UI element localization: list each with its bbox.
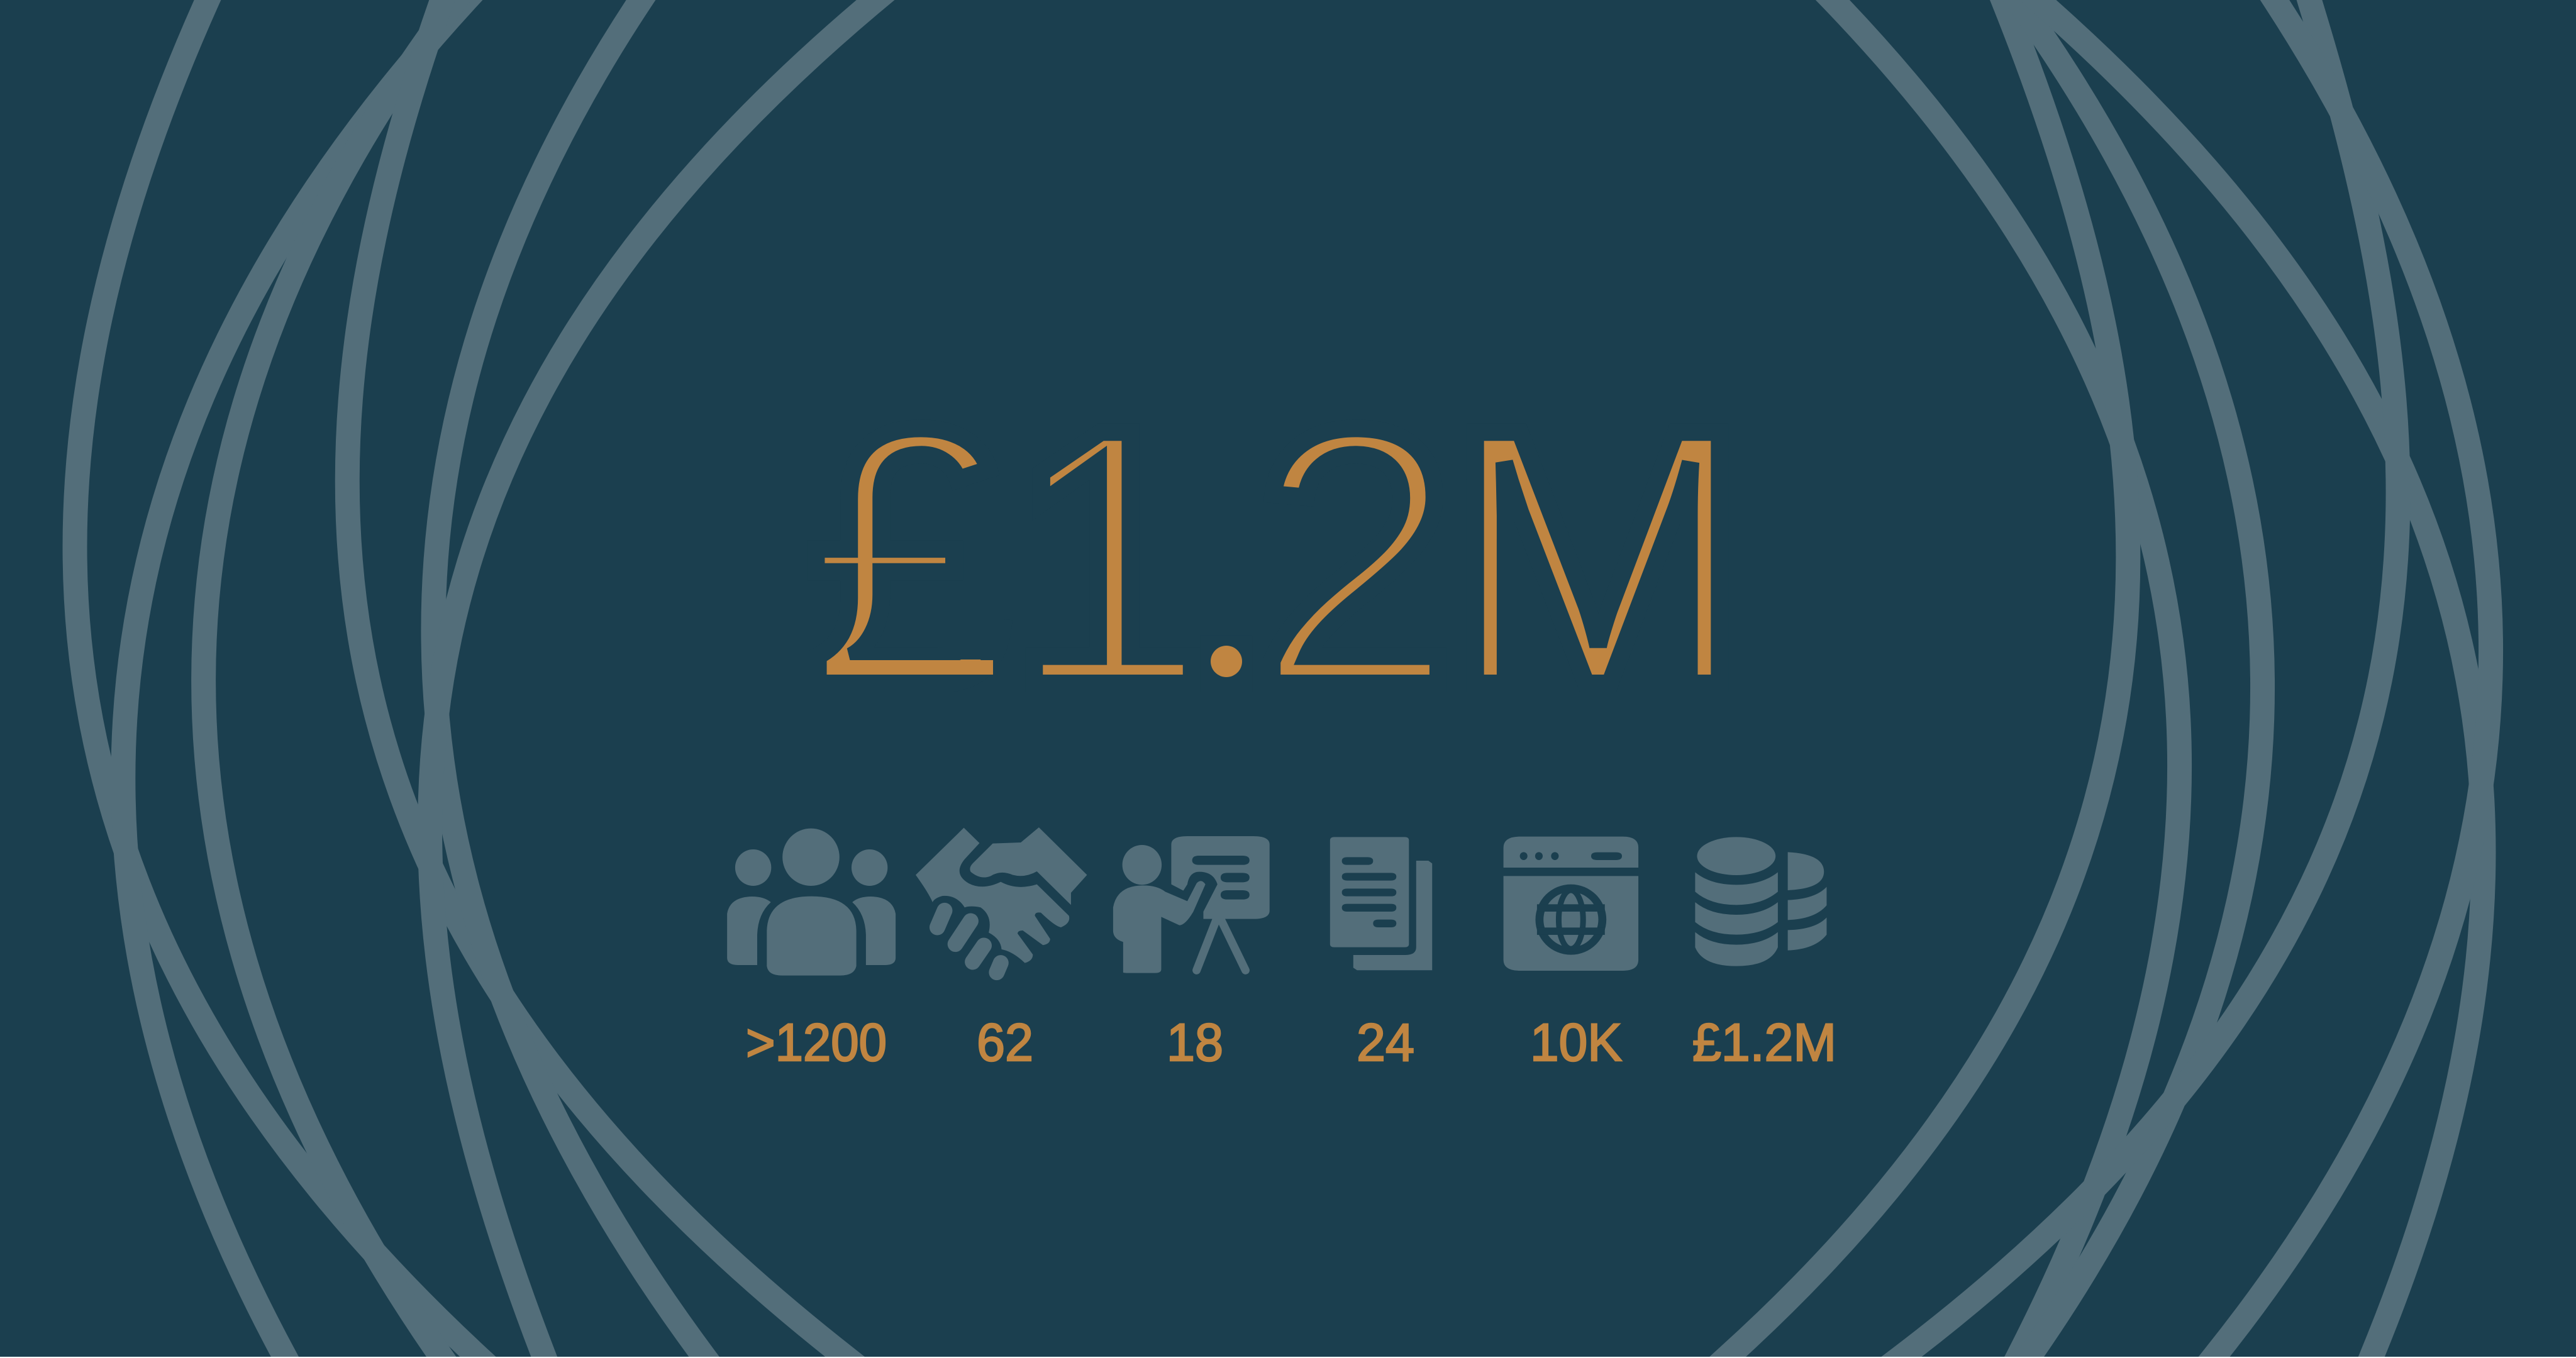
decorative ring outlines: right side <box>1685 0 2491 1358</box>
decorative ring outlines: left side <box>75 0 921 1358</box>
stat label: partners: 62 <box>977 1013 1033 1072</box>
stat label: web views: 10K <box>1530 1013 1622 1072</box>
icon: coin stacks <box>1695 837 1826 966</box>
stat label: funding: £1.2M <box>1692 1013 1836 1072</box>
icon: browser window with globe <box>1504 837 1638 971</box>
icon: handshake <box>916 827 1087 973</box>
icon: documents <box>1330 837 1432 970</box>
stat label: presentations: 18 <box>1167 1013 1223 1072</box>
icon: presenter at easel <box>1113 836 1270 973</box>
icon: people <box>727 829 896 976</box>
stat label: people: >1200 <box>746 1013 887 1072</box>
stat label: documents: 24 <box>1357 1013 1414 1072</box>
title: headline figure: £1.2M <box>806 353 1750 761</box>
